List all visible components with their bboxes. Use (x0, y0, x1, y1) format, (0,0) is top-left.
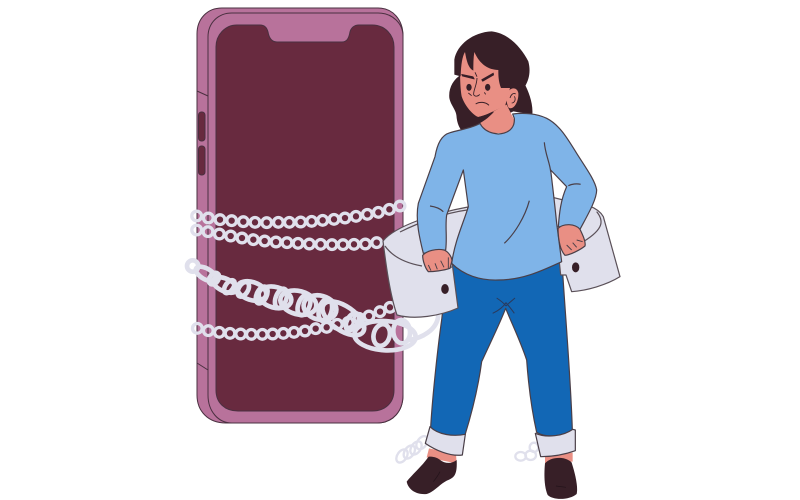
right hand fingers (567, 240, 583, 250)
right hand (558, 225, 585, 255)
phone screen with notch (216, 25, 394, 411)
left jean cuff (425, 427, 465, 455)
sweater (417, 113, 597, 280)
second chain (192, 225, 381, 249)
left ankle (427, 448, 457, 463)
left shoe (407, 457, 457, 494)
person (383, 31, 620, 499)
side button upper (198, 112, 205, 141)
mouth (476, 102, 489, 105)
left eyebrow (462, 74, 474, 79)
chains around phone (187, 201, 438, 352)
jeans (431, 262, 572, 436)
side seam lower (197, 363, 208, 370)
eyes (466, 84, 490, 91)
shoe creases (433, 472, 566, 487)
ear detail (510, 93, 516, 103)
small chain left of shoe (394, 434, 430, 465)
left hand (423, 249, 452, 272)
head (449, 31, 532, 135)
front hair (454, 31, 530, 88)
legs and shoes (407, 262, 577, 499)
left hand fingers (428, 257, 448, 271)
chin shadow (478, 111, 494, 123)
face (460, 48, 510, 117)
ear (506, 88, 518, 108)
lower chain (192, 302, 395, 339)
phone front frame (208, 13, 403, 423)
right jean cuff (535, 429, 575, 457)
side seam upper (197, 91, 208, 96)
right cuff button (572, 262, 579, 272)
right eyebrow (482, 73, 494, 81)
upper body (417, 113, 597, 280)
neck (480, 105, 515, 133)
large chain (187, 260, 438, 352)
phone back body (197, 8, 403, 423)
left cuff button (441, 284, 449, 294)
back hair (449, 61, 532, 135)
nose and wrinkles (468, 72, 486, 96)
sweater folds (430, 142, 581, 243)
crotch creases (493, 298, 515, 313)
right ankle (545, 453, 573, 463)
left cuff rim line (400, 210, 467, 232)
left cuff inner crease (385, 246, 452, 269)
right sleeve cuff (white, large) (550, 197, 620, 292)
phone (197, 8, 403, 423)
top chain (192, 201, 405, 227)
side button lower (198, 146, 205, 175)
right shoe (544, 458, 577, 499)
right cuff inner arc (583, 212, 601, 242)
small chain left of right shoe (515, 443, 538, 461)
left sleeve cuff (white, large) (383, 207, 468, 317)
